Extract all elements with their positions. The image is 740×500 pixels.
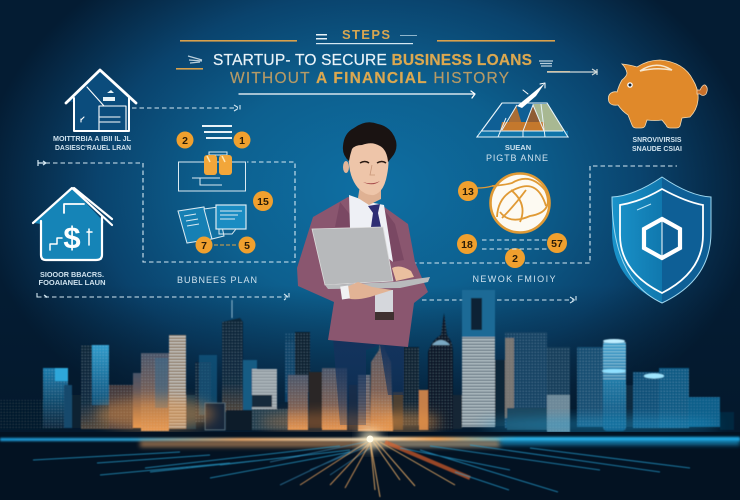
- badge 5: 5: [244, 240, 250, 252]
- badge 2: 2: [512, 253, 518, 265]
- badge 18: 18: [461, 239, 473, 251]
- label: pyramid: [486, 143, 548, 163]
- belt: [375, 312, 394, 320]
- tie: [368, 204, 381, 227]
- badge 13: 13: [462, 186, 474, 198]
- connector: left dashed box: [38, 162, 295, 262]
- arrow: bottom left: [37, 293, 289, 300]
- icon: plan documents: [178, 205, 246, 243]
- connector tip: [38, 160, 46, 166]
- business plan: list lines: [202, 125, 232, 139]
- connector: right dashed box: [412, 166, 677, 263]
- label: loan house: SIOOOR BBACRS.: [40, 270, 104, 279]
- person: [297, 122, 430, 425]
- arrow: bottom right: [422, 296, 576, 303]
- badge 15: [253, 191, 273, 211]
- laptop base: [325, 277, 430, 289]
- laptop: [312, 227, 393, 285]
- connectors: network: [482, 240, 547, 249]
- badge 7: [196, 236, 212, 254]
- eyes, nose, mouth: [360, 162, 386, 184]
- badge 57: 57: [551, 238, 563, 250]
- arrow: house to plan: [132, 105, 240, 111]
- city glow: [95, 398, 720, 433]
- icon: loan house: [33, 188, 112, 260]
- shirt: [349, 195, 393, 262]
- title block: STEPS: [342, 27, 390, 42]
- badge 2: [176, 132, 194, 148]
- badge 7: 7: [201, 240, 207, 252]
- lapels: [335, 202, 404, 262]
- arrow: title to pyramid: [239, 91, 475, 98]
- connector between badges: [214, 244, 238, 246]
- badge 15: 15: [257, 196, 269, 208]
- ground: [0, 432, 740, 500]
- label: mortgage house: MOITTRBIA A IBII IL JL: [53, 134, 131, 143]
- skyline: [0, 290, 734, 432]
- label: piggy bank: [632, 135, 682, 153]
- icon: piggy bank: [608, 60, 707, 128]
- title block: WITHOUT A FINANCIAL HISTORY: [230, 70, 509, 87]
- icon: plan diagram: [178, 152, 246, 191]
- face: [349, 142, 388, 195]
- label: mortgage house: DASIESC'RAUEL LRAN: [55, 143, 131, 152]
- label: business plan: BUBNEES PLAN: [177, 275, 257, 285]
- label: network: NEWOK FMIOIY: [472, 274, 556, 284]
- icon: loan house: $: [63, 220, 81, 255]
- label: pyramid: SUEAN: [505, 143, 531, 152]
- icon: network circle: [477, 174, 550, 232]
- badge 1: 1: [239, 135, 245, 147]
- arrow: title to piggy bank: [547, 69, 597, 75]
- label: mortgage house: [53, 134, 131, 152]
- hair: [343, 122, 396, 162]
- badge 13: [458, 181, 478, 201]
- label: piggy bank: SNROVIVIRSIS: [632, 135, 682, 144]
- icon: shield: [612, 177, 711, 303]
- badge 2: [505, 248, 525, 268]
- label: piggy bank: SNAUDE CSIAI: [632, 144, 682, 153]
- background lower shade: [0, 285, 740, 435]
- lower shirt: [375, 290, 393, 313]
- title block: STARTUP- TO SECURE BUSINESS LOANS: [213, 52, 532, 69]
- badge 18: [457, 234, 477, 254]
- light streaks: [0, 430, 740, 497]
- badge 5: [238, 236, 256, 254]
- icon: pyramid chart: [477, 83, 568, 137]
- badge 1: [234, 132, 250, 148]
- neck: [358, 185, 381, 205]
- label: pyramid: PIGTB ANNE: [486, 153, 548, 163]
- hands: [340, 267, 414, 299]
- jacket: [297, 197, 428, 347]
- trousers: [333, 338, 404, 425]
- ear: [343, 161, 349, 173]
- badge 57: [547, 233, 567, 253]
- badge 2: 2: [182, 135, 188, 147]
- label: loan house: [38, 270, 106, 287]
- label: loan house: FOOAIANEL LAUN: [38, 278, 106, 287]
- icon: mortgage house: [66, 70, 137, 131]
- title block: [176, 27, 570, 87]
